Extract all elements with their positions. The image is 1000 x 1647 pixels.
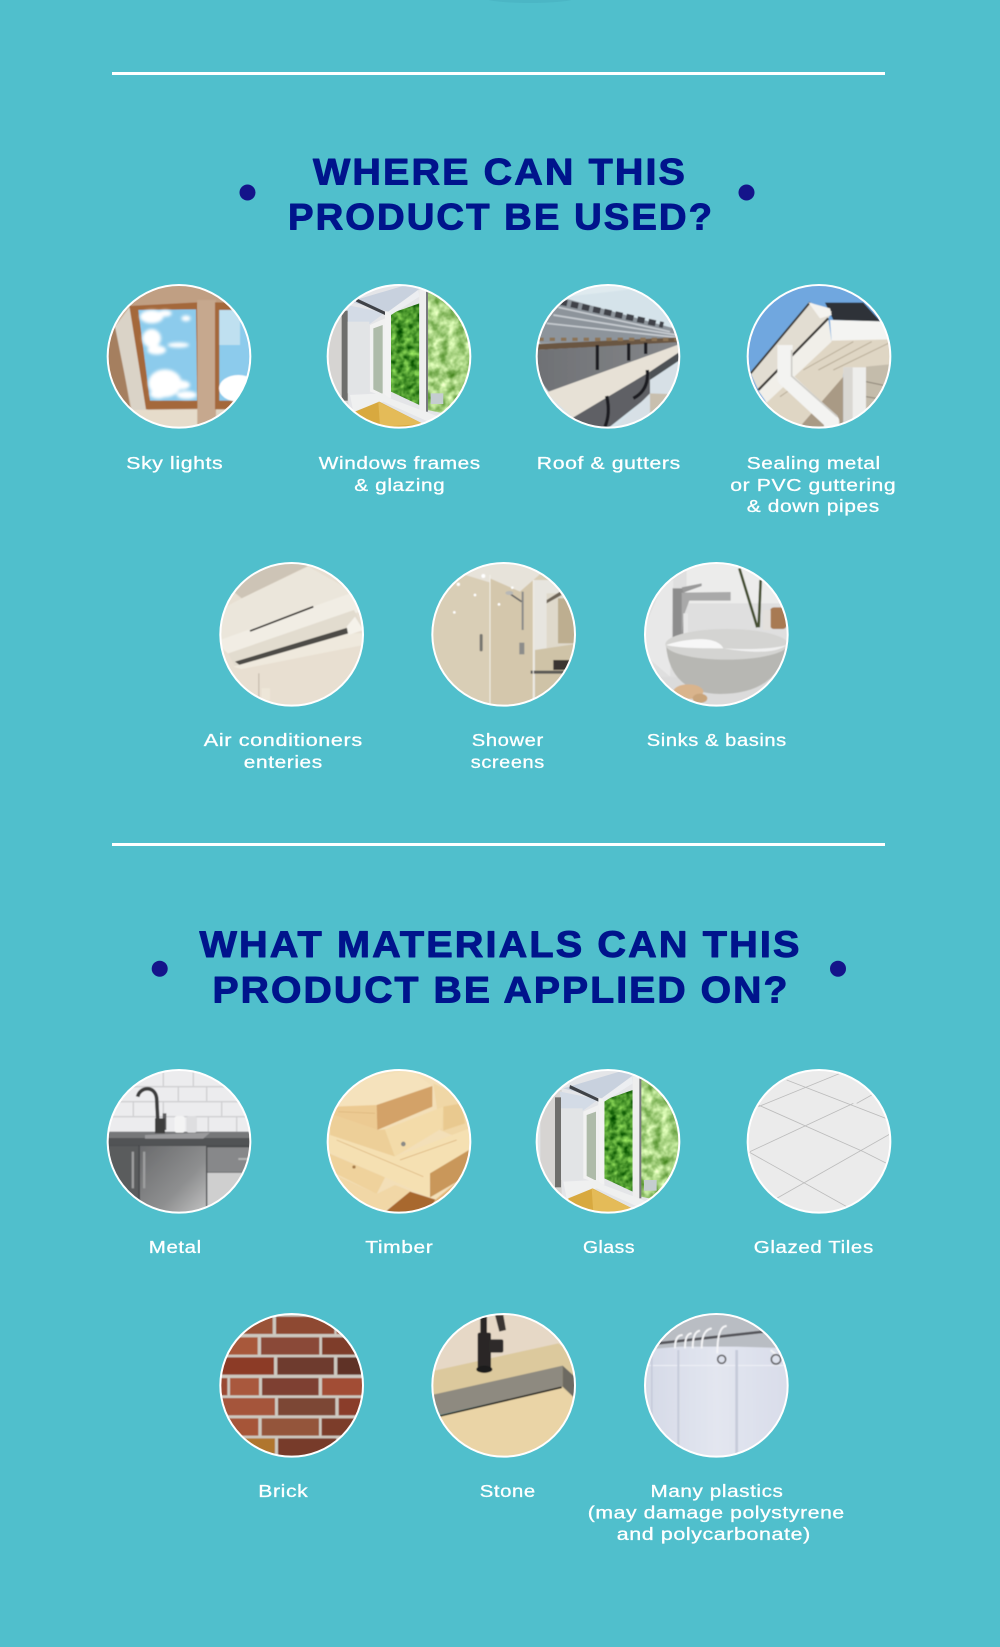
label: shower screens xyxy=(471,730,545,772)
panel: what materials can this product be applied on xyxy=(103,923,897,1544)
label: shower screens: Shower xyxy=(472,730,544,750)
item: roof and gutters xyxy=(533,280,683,473)
photo: shower screen xyxy=(430,560,580,710)
photo: white tiles xyxy=(746,1069,892,1214)
item: glazed tiles xyxy=(743,1067,897,1257)
photo: window glass xyxy=(536,1069,680,1214)
item: timber xyxy=(323,1067,477,1257)
item: sinks and basins xyxy=(640,560,793,750)
label: many plastics, may damage polystyrene and polycarbonate: Many plastics xyxy=(650,1481,784,1501)
photo: brick wall xyxy=(217,1310,367,1460)
heading: what materials can this product be applied on: PRODUCT BE APPLIED ON? xyxy=(212,968,790,1010)
photo: shower curtain xyxy=(644,1313,789,1458)
label: sky lights: Sky lights xyxy=(126,453,223,473)
heading: what materials can this product be applied on: WHAT MATERIALS CAN THIS xyxy=(200,923,802,965)
label: metal: Metal xyxy=(149,1237,202,1257)
item: sky lights xyxy=(103,280,258,473)
label: many plastics, may damage polystyrene and polycarbonate: and polycarbonate) xyxy=(617,1524,811,1544)
photo: air conditioner xyxy=(217,560,367,710)
photo: white downpipe xyxy=(746,284,892,429)
photo: stacked timber xyxy=(326,1069,472,1214)
label: many plastics, may damage polystyrene and polycarbonate: (may damage polystyrene xyxy=(588,1502,845,1522)
item: many plastics xyxy=(588,1310,845,1544)
label: sealing metal or PVC guttering and down pipes: & down pipes xyxy=(747,496,880,516)
heading: what materials can this product be applied on xyxy=(152,923,846,1010)
photo: stone bench with tap xyxy=(430,1310,580,1463)
label: air conditioners enteries: Air conditioners xyxy=(204,730,363,750)
photo: stainless steel kitchen xyxy=(103,1067,257,1217)
label: many plastics, may damage polystyrene and polycarbonate xyxy=(588,1481,845,1544)
panel: where can this product be used xyxy=(103,150,897,772)
item: metal xyxy=(103,1067,257,1257)
label: windows frames and glazing xyxy=(319,453,481,495)
item: windows frames and glazing xyxy=(319,280,481,495)
item: stone xyxy=(430,1310,580,1501)
label: brick: Brick xyxy=(258,1481,308,1501)
photo: skylight windows xyxy=(106,284,252,429)
label: shower screens: screens xyxy=(471,752,545,772)
label: sealing metal or PVC guttering and down pipes: Sealing metal xyxy=(747,453,881,473)
label: windows frames and glazing: Windows frames xyxy=(319,453,481,473)
label: air conditioners enteries: enteries xyxy=(244,752,323,772)
label: glass: Glass xyxy=(583,1237,635,1257)
label: timber: Timber xyxy=(365,1237,433,1257)
label: stone: Stone xyxy=(480,1481,536,1501)
item: air conditioners enteries xyxy=(204,560,367,772)
heading: where can this product be used: PRODUCT BE USED? xyxy=(288,196,714,238)
item: sealing metal or PVC guttering and down pipes xyxy=(730,280,897,516)
heading: where can this product be used: WHERE CAN THIS xyxy=(313,150,687,192)
item: shower screens xyxy=(430,560,580,772)
heading: where can this product be used xyxy=(240,150,754,238)
label: roof and gutters: Roof & gutters xyxy=(537,453,681,473)
item: brick xyxy=(217,1310,367,1501)
label: windows frames and glazing: & glazing xyxy=(354,475,445,495)
label: air conditioners enteries xyxy=(204,730,363,772)
label: glazed tiles: Glazed Tiles xyxy=(754,1237,874,1257)
divider: top xyxy=(112,72,885,75)
label: sinks and basins: Sinks & basins xyxy=(647,730,787,750)
photo: sink basin xyxy=(640,560,793,710)
label: sealing metal or PVC guttering and down pipes xyxy=(730,453,896,516)
label: sealing metal or PVC guttering and down pipes: or PVC guttering xyxy=(730,475,896,495)
divider: middle xyxy=(112,843,885,846)
photo: open window xyxy=(326,284,472,429)
photo: roof gutter xyxy=(533,280,683,433)
item: glass xyxy=(537,1067,692,1257)
